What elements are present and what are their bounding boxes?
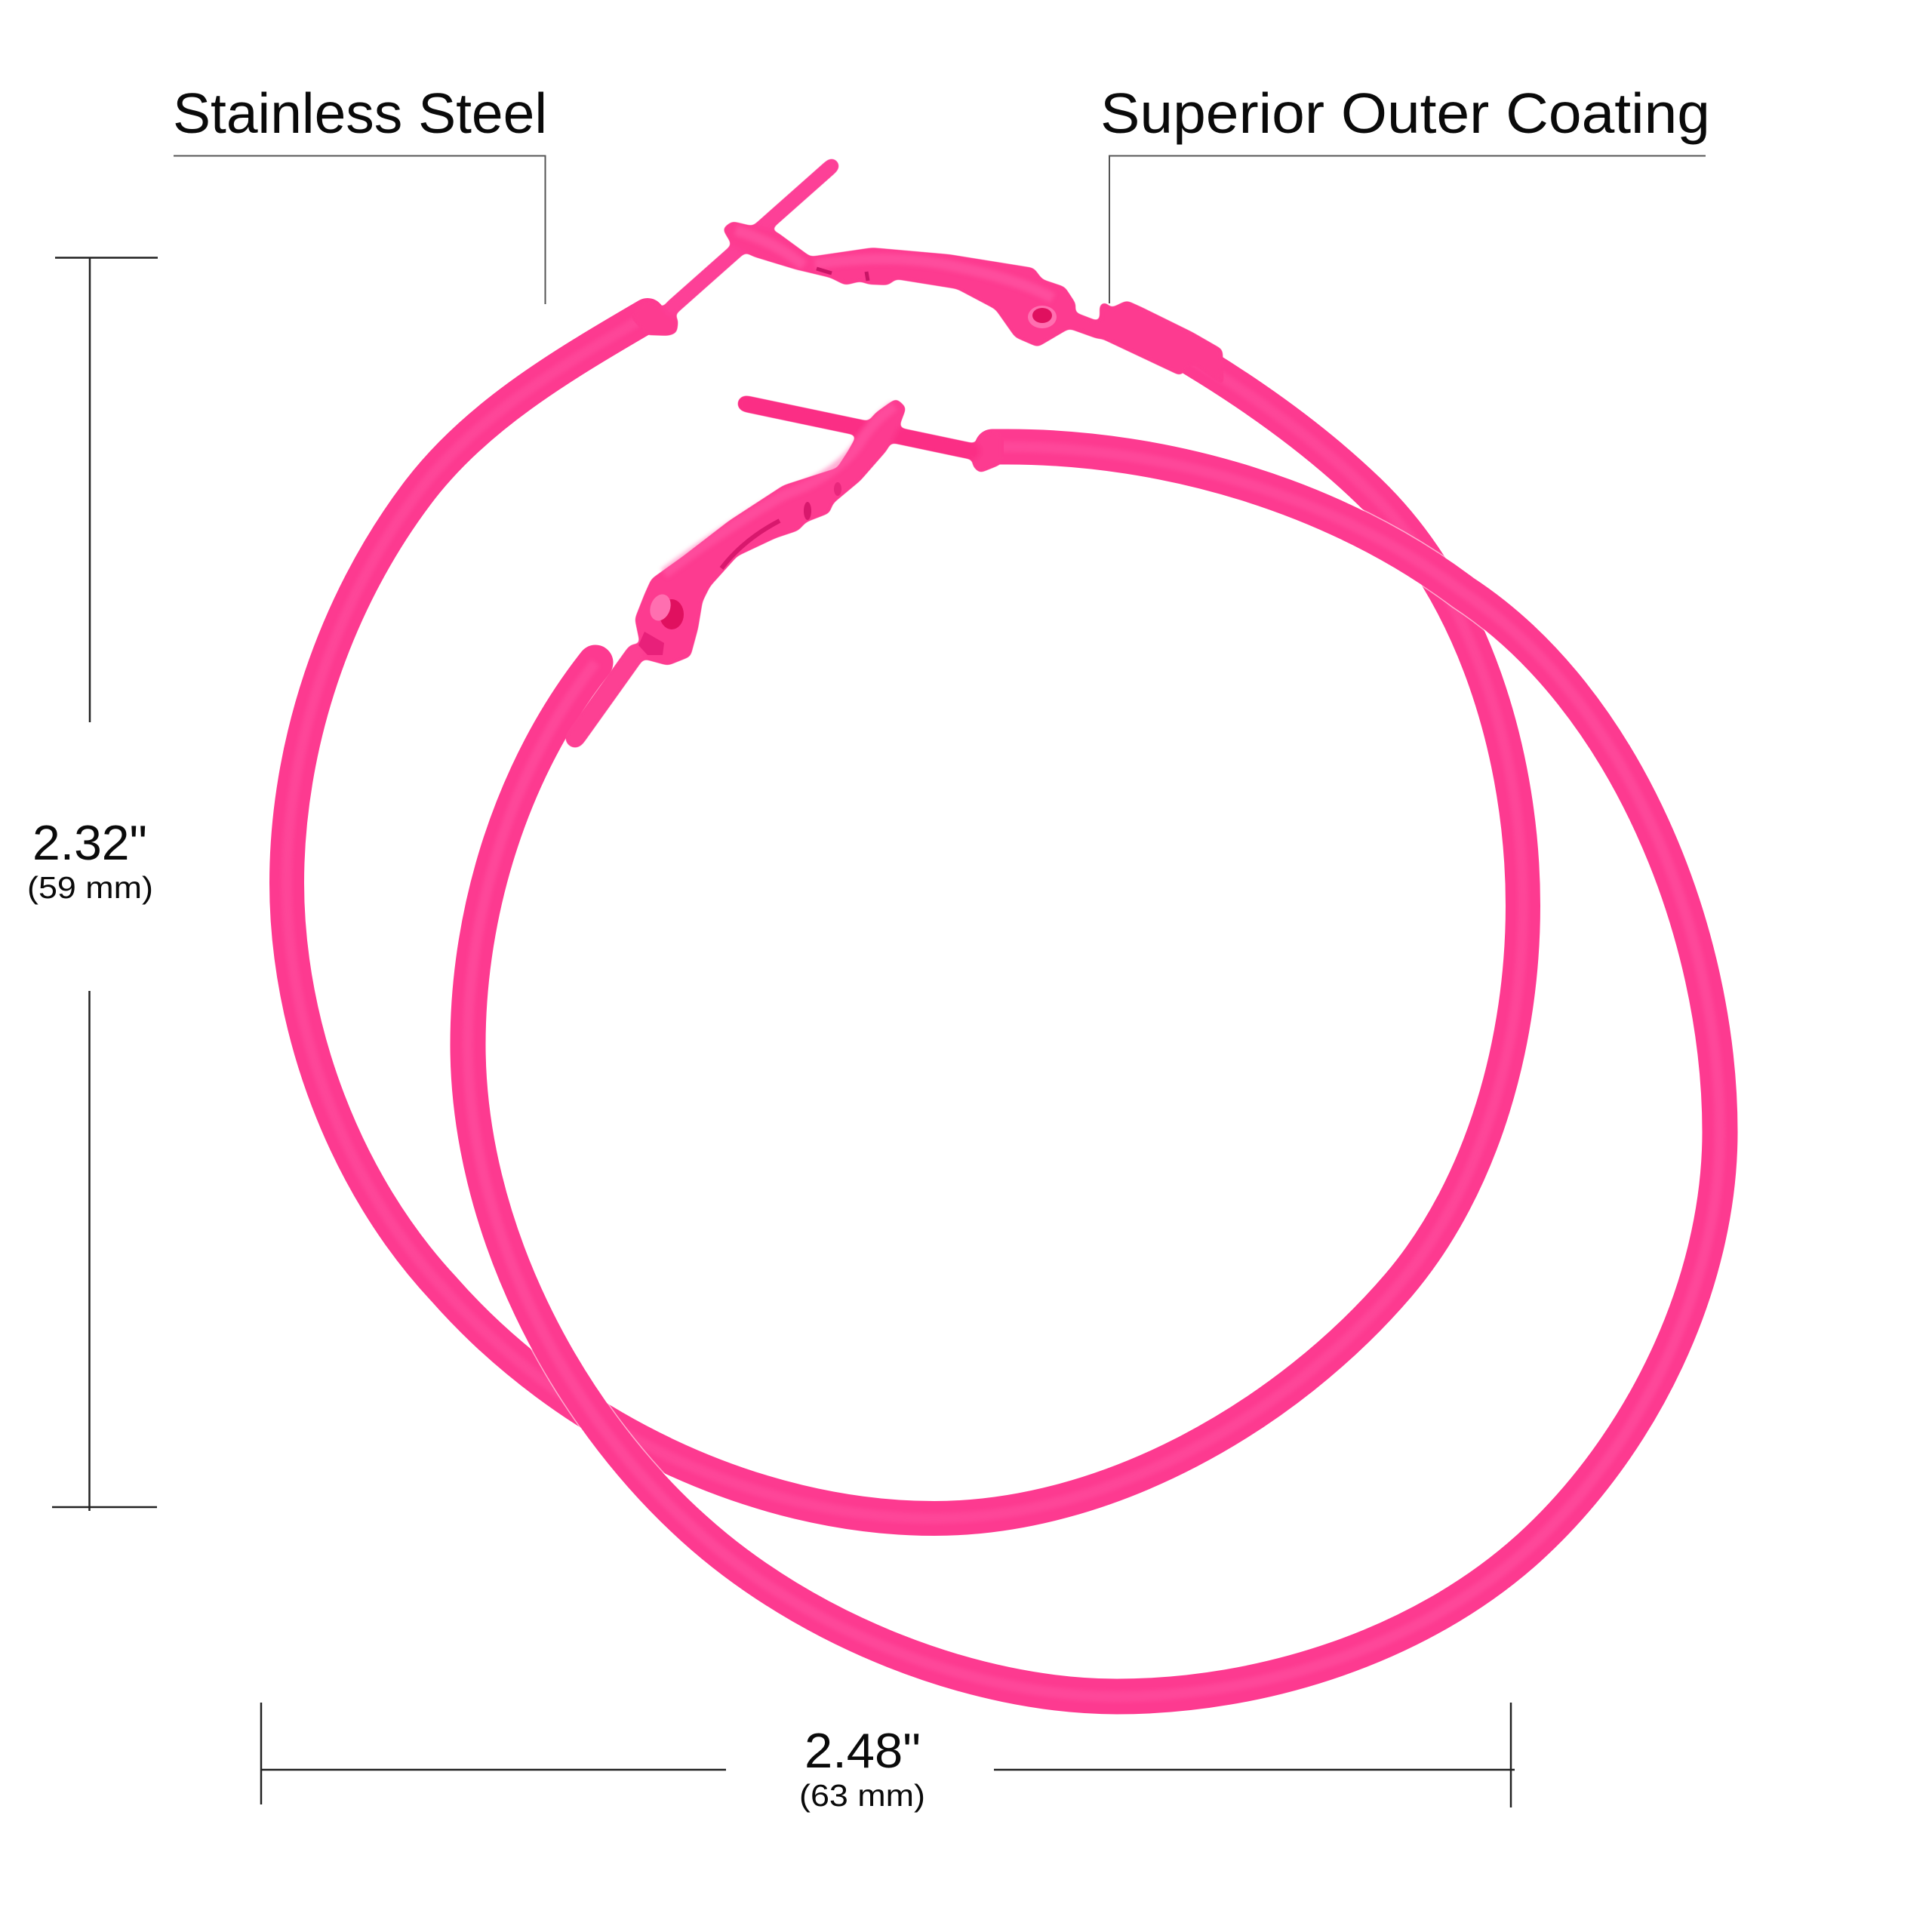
- leader line: [174, 155, 545, 304]
- front hoop hardware silhouette: [575, 398, 1004, 738]
- width value metric: (63 mm): [799, 1778, 925, 1813]
- height dimension lines: [52, 257, 158, 1511]
- back hoop clasp notches: [817, 269, 868, 281]
- width value: 2.48": [804, 1723, 921, 1778]
- back hoop clasp highlight: [736, 230, 1053, 298]
- width dimension: [261, 1703, 1515, 1813]
- back hoop catch end: [1076, 300, 1224, 386]
- callout: superior outer coating: [1100, 82, 1710, 303]
- height value: 2.32": [32, 815, 147, 870]
- front hoop wire and pin: [746, 404, 972, 451]
- front hoop clasp highlight: [664, 406, 894, 574]
- front hoop catch wire: [575, 654, 635, 738]
- label: superior outer coating: Superior Outer Coating: [1100, 82, 1710, 145]
- width dimension lines: [261, 1703, 1515, 1807]
- back hoop hardware silhouette: [630, 166, 1224, 386]
- back hoop end bump: [630, 300, 678, 336]
- height dimension: [27, 257, 158, 1511]
- back hoop clasp hole: [1028, 306, 1057, 328]
- earring: back hoop: [287, 166, 1523, 1518]
- back hoop wire and pin: [672, 166, 832, 308]
- front hoop end flange: [972, 430, 1004, 473]
- back hoop catch wire: [1068, 311, 1103, 340]
- leader line: [1109, 155, 1706, 303]
- height value metric: (59 mm): [27, 870, 153, 905]
- front hoop clasp pivot: [647, 592, 684, 629]
- front hoop lever clasp: [635, 398, 906, 666]
- label: stainless steel: Stainless Steel: [173, 82, 547, 145]
- front hoop clasp slit and notches: [721, 482, 841, 568]
- front hoop clasp lower jaw: [638, 632, 664, 655]
- callout: stainless steel: [173, 82, 547, 304]
- back hoop lever clasp: [722, 221, 1076, 347]
- earring: front hoop: [468, 398, 1720, 1697]
